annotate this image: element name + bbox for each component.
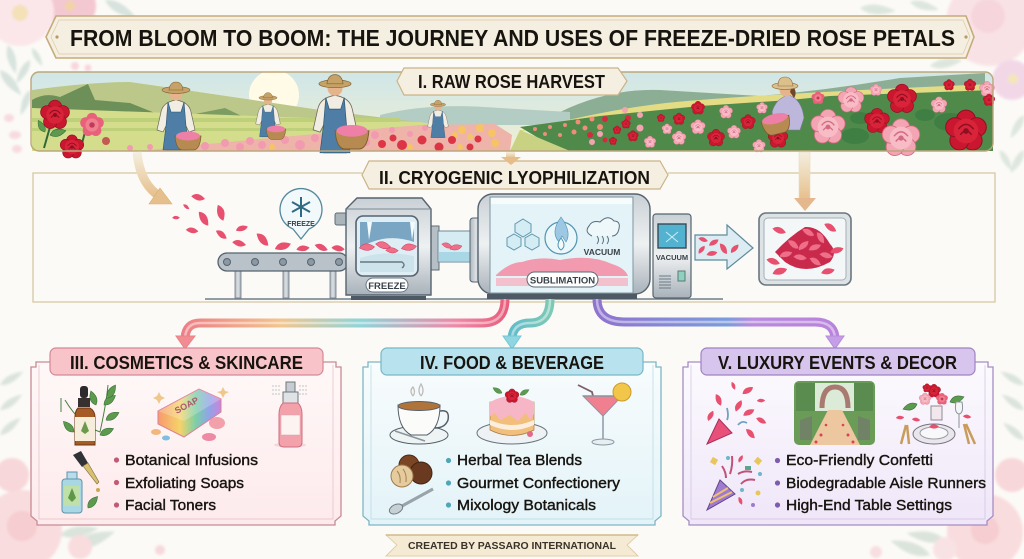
footer ribbon: CREATED BY PASSARO INTERNATIONAL <box>408 540 617 552</box>
bullet list: food: Herbal Tea Blends <box>457 452 582 469</box>
heading: cosmetics: III. COSMETICS & SKINCARE <box>70 352 303 373</box>
sublimation label <box>527 272 598 287</box>
large roses left <box>36 100 110 158</box>
bullet list: events <box>775 452 986 514</box>
heading: food: IV. FOOD & BEVERAGE <box>420 352 604 373</box>
icon: blue serum bottle with dropper <box>62 451 100 513</box>
vacuum control unit <box>653 214 691 298</box>
arrow: chamber to food <box>503 299 550 349</box>
freeze callout icon <box>280 189 322 239</box>
freeze machine label <box>366 278 408 292</box>
bullet list: events: High-End Table Settings <box>786 497 952 514</box>
icon: rose cake on plate <box>477 386 547 444</box>
icon: rainbow soap bar: SOAP <box>173 395 200 416</box>
conveyor belt <box>205 253 723 299</box>
freeze machine: FREEZE <box>368 281 406 292</box>
flower rows <box>127 107 644 152</box>
icon: tea cup and saucer <box>390 384 448 444</box>
bullet list: food: Mixology Botanicals <box>457 497 596 514</box>
vacuum cloud: VACUUM <box>584 247 620 257</box>
connecting pipe with petals <box>438 231 474 262</box>
icon: spoon <box>388 489 433 516</box>
sublimation chamber: SUBLIMATION <box>530 276 595 286</box>
bullet list: cosmetics: Exfoliating Soaps <box>125 475 244 492</box>
bullet list: food <box>446 452 621 514</box>
freeze machine <box>335 198 439 300</box>
freeze callout icon: FREEZE <box>287 221 315 228</box>
farmers <box>157 75 448 153</box>
heading: events: V. LUXURY EVENTS & DECOR <box>718 352 957 373</box>
rose row middle <box>609 101 788 152</box>
large roses right <box>811 79 995 156</box>
sun <box>249 70 299 120</box>
arrow: harvest to conveyor <box>137 152 172 204</box>
footer ribbon <box>386 535 638 556</box>
title text: FROM BLOOM TO BOOM: THE JOURNEY AND USES OF FREEZE-DRIED ROSE PETALS <box>70 25 955 51</box>
bullet list: cosmetics: Botanical Infusions <box>125 452 258 469</box>
panel: raw rose harvest scene <box>31 70 995 158</box>
icon: spray toner bottle <box>272 382 308 448</box>
bullet list: cosmetics: Facial Toners <box>125 497 216 514</box>
icon: petal confetti cone <box>706 381 767 444</box>
petal pile <box>496 258 628 276</box>
arrow: chamber to events <box>597 299 844 349</box>
label: II. Cryogenic Lyophilization: II. CRYOGENIC LYOPHILIZATION <box>379 167 650 188</box>
arrow: harvest to chamber label <box>501 152 521 165</box>
floral corner: top left <box>0 0 139 153</box>
floral corner: bottom right <box>870 368 1024 559</box>
floral corner: top right <box>860 0 1024 175</box>
arrow: harvest to dried tray <box>794 152 816 211</box>
ice cubes <box>507 219 539 250</box>
vacuum control unit: VACUUM <box>656 253 688 262</box>
icon: party popper <box>707 454 762 510</box>
bullet list: events: Eco-Friendly Confetti <box>786 452 933 469</box>
bullet list: food: Gourmet Confectionery <box>457 475 621 492</box>
hills and fields <box>32 73 993 151</box>
tray of dried petals <box>759 213 851 285</box>
falling petals <box>172 193 345 253</box>
arrow: chamber to cosmetics <box>176 299 505 349</box>
title banner <box>46 16 974 58</box>
panel III: cosmetics and skincare <box>31 348 341 525</box>
heading: food <box>381 348 643 375</box>
icon: chocolate truffles <box>391 455 432 487</box>
icon: amber dropper bottle with leaves <box>61 383 120 445</box>
floral corner: bottom left <box>0 368 165 559</box>
bullet list: cosmetics <box>114 452 258 514</box>
icon: garden aisle arch <box>794 381 875 445</box>
vacuum cloud <box>584 218 620 257</box>
icon: table setting with bouquet <box>896 384 975 444</box>
section II frame <box>33 173 995 302</box>
sublimation chamber <box>470 194 650 299</box>
panel V: luxury events and decor <box>683 348 993 525</box>
woman picking roses <box>760 77 804 137</box>
label: I. Raw Rose Harvest: I. RAW ROSE HARVEST <box>418 71 606 92</box>
flame and droplet <box>545 217 577 254</box>
output arrow with petals <box>695 225 753 269</box>
icon: cocktail with lemon <box>578 383 631 445</box>
panel IV: food and beverage <box>363 348 661 525</box>
bullet list: events: Biodegradable Aisle Runners <box>786 475 986 492</box>
icon: rainbow soap bar <box>151 387 229 441</box>
